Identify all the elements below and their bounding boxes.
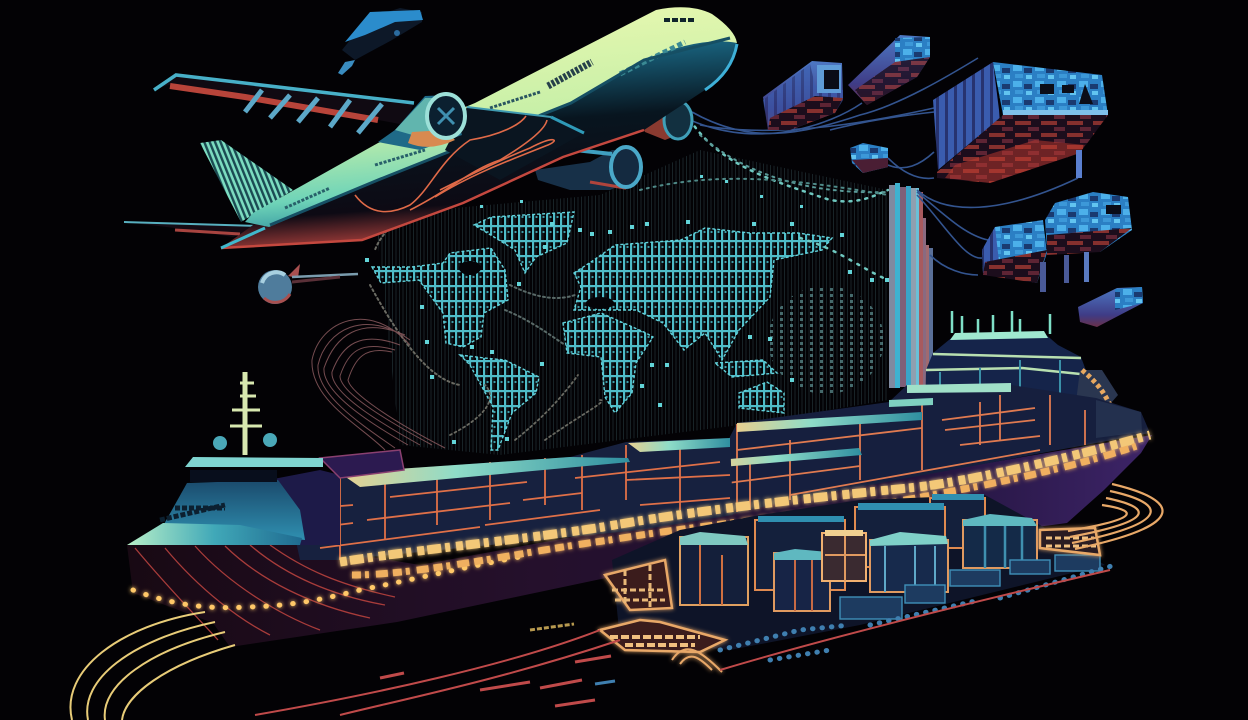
orange machines left	[600, 560, 725, 672]
icon: data columns	[889, 183, 933, 388]
tail fin	[200, 140, 293, 222]
container 1	[763, 61, 843, 130]
container stacks left	[285, 438, 733, 560]
blue tractors	[840, 555, 1100, 619]
road rings left	[70, 612, 235, 720]
engine left	[378, 94, 465, 150]
truck 5	[963, 514, 1037, 568]
inner wing panel	[445, 107, 584, 180]
container 3: large	[933, 62, 1108, 183]
icon: ribbon of wires left of the map	[312, 319, 445, 450]
deck lights	[133, 435, 1150, 608]
convoy shadow mass	[612, 495, 1105, 650]
icon: small flying vehicle top	[338, 8, 423, 75]
airplane	[124, 7, 737, 248]
orange wires	[355, 116, 554, 212]
rear cabin	[253, 450, 404, 545]
truck 4	[870, 532, 948, 592]
machine right	[1040, 528, 1100, 555]
wheels row	[720, 565, 1115, 660]
road lines bottom	[255, 570, 1110, 715]
truck convoy	[380, 494, 1115, 706]
container stacks right	[718, 383, 1150, 516]
icon: connecting cables	[690, 58, 1078, 275]
scattered data points	[365, 175, 889, 444]
bridge tower	[127, 457, 323, 545]
far engine	[640, 101, 692, 140]
wing	[154, 75, 414, 133]
container 7	[1078, 287, 1143, 327]
small vehicles	[380, 624, 615, 706]
container 2	[848, 35, 930, 105]
dotted strands	[370, 120, 888, 440]
container 5	[982, 220, 1047, 283]
mast	[213, 372, 277, 455]
fuselage top	[245, 7, 737, 227]
masts	[952, 311, 1050, 334]
stabilizer	[124, 222, 261, 237]
trailer back row	[755, 498, 985, 590]
engine right	[535, 147, 641, 190]
cargo ship	[127, 311, 1152, 647]
road rings right	[1068, 484, 1163, 549]
truck 2	[774, 549, 830, 611]
floating cargo containers	[763, 35, 1143, 327]
icon: world map made of dots	[365, 120, 889, 455]
container 6	[1040, 192, 1132, 292]
right superstructure	[925, 311, 1118, 420]
trailer back tops	[758, 494, 984, 522]
icon: small drone left	[258, 264, 358, 304]
hull	[127, 435, 1152, 647]
fuselage lower belly	[221, 28, 737, 248]
truck 3	[822, 530, 866, 581]
container 4	[850, 143, 888, 173]
truck 1	[680, 532, 748, 605]
